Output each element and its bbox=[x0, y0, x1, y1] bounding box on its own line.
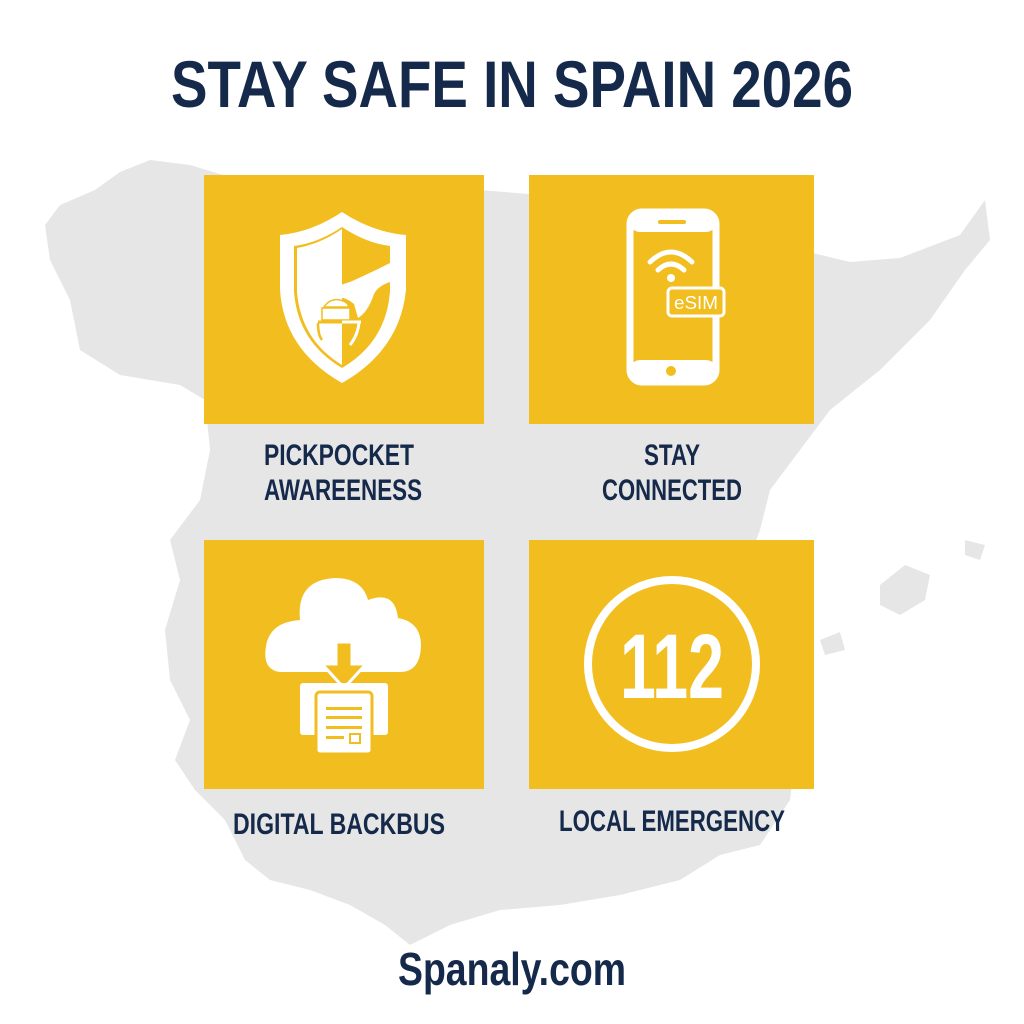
icon: 112 circle bbox=[588, 580, 756, 748]
background map of Spain bbox=[45, 160, 990, 945]
heading: stay connected bbox=[602, 439, 742, 507]
panel: pickpocket awareness bbox=[204, 175, 484, 424]
panel: stay connected bbox=[529, 175, 814, 424]
heading: local emergency: LOCAL EMERGENCY bbox=[559, 805, 785, 838]
title: STAY SAFE IN SPAIN 2026 bbox=[171, 47, 853, 121]
heading: pickpocket awareness bbox=[264, 439, 422, 507]
icon: phone with esim: eSIM bbox=[674, 293, 718, 313]
icon: 112 circle: 112 bbox=[620, 616, 724, 718]
heading: pickpocket awareness: PICKPOCKET bbox=[264, 439, 414, 472]
icon: cloud with document bbox=[265, 578, 421, 754]
panel: local emergency bbox=[529, 540, 814, 789]
heading: pickpocket awareness: AWAREENESS bbox=[264, 474, 422, 507]
icon: phone with esim bbox=[630, 212, 724, 382]
heading: stay connected: CONNECTED bbox=[602, 474, 742, 507]
icon: shield with hand bbox=[280, 212, 406, 383]
footer: website: Spanaly.com bbox=[398, 943, 626, 995]
heading: digital backbus: DIGITAL BACKBUS bbox=[233, 808, 445, 841]
heading: stay connected: STAY bbox=[644, 439, 700, 472]
panel: digital backups bbox=[204, 540, 484, 789]
